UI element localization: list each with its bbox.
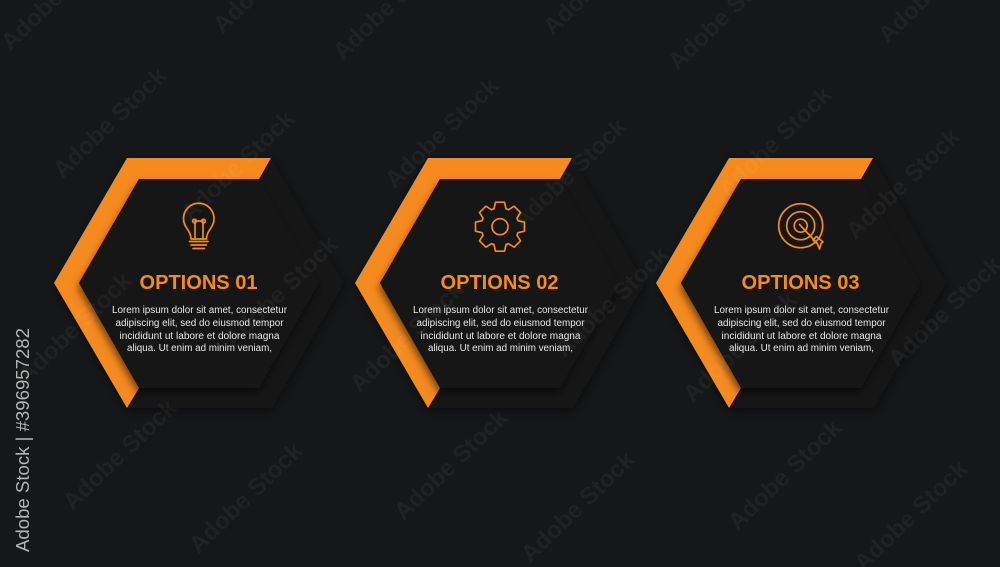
icon: gear [476,202,524,251]
front hexagon 2 [380,179,620,388]
text block 2: adipiscing elit, sed do eiusmod tempor [416,318,585,329]
orange hexagon frame 2 [355,158,572,408]
text block 3: aliqua. Ut enim ad minim veniam, [729,343,874,354]
orange hexagon frame 3 [656,158,873,408]
back hexagon 3 [657,158,946,408]
orange hexagon frame 1 [54,158,271,408]
text block 2 [413,305,589,354]
watermarks: Adobe Stock [345,276,470,398]
watermarks: Adobe Stock [380,72,505,194]
heading: options 02: OPTIONS 02 [440,272,558,294]
watermarks: Adobe Stock [723,414,848,536]
text block 3 [714,305,890,354]
watermarks: Adobe Stock [550,241,675,363]
icon: target with arrow [779,204,823,249]
text block 1: adipiscing elit, sed do eiusmod tempor [116,318,284,329]
icon: light bulb [184,203,214,248]
text block 3: Lorem ipsum dolor sit amet, consectetur [714,305,890,316]
heading: options 03: OPTIONS 03 [742,272,860,294]
panel: option 1 [54,158,344,408]
front hexagon 1 [79,179,319,388]
watermarks: Adobe Stock [508,113,633,235]
watermarks: Adobe Stock [219,231,344,353]
front hexagon 3 [681,179,921,388]
watermarks: Adobe Stock [678,286,803,408]
text block 2: Lorem ipsum dolor sit amet, consectetur [413,305,589,316]
text block 1: incididunt ut labore et dolore magna [120,331,280,342]
heading: options 01: OPTIONS 01 [140,272,258,294]
watermarks: Adobe Stock [176,105,301,227]
watermarks: Adobe Stock [516,446,641,567]
text block 3: incididunt ut labore et dolore magna [722,331,882,342]
text block 1: Lorem ipsum dolor sit amet, consectetur [112,305,288,316]
panel: option 3 [656,158,946,408]
watermarks: Adobe Stock [58,394,183,516]
text block 1 [112,305,288,354]
back hexagon 1 [55,158,344,408]
back hexagon 2 [356,158,645,408]
watermarks: Adobe Stock [48,62,173,184]
text block 1: aliqua. Ut enim ad minim veniam, [127,343,272,354]
watermarks: Adobe Stock [389,404,514,526]
watermarks: Adobe Stock [184,437,309,559]
stock id label: Adobe Stock | #396957282 [13,328,33,552]
watermarks: Adobe Stock [841,123,966,245]
panel: option 2 [355,158,645,408]
watermarks: Adobe Stock [713,81,838,203]
text block 2: incididunt ut labore et dolore magna [420,331,581,342]
text block 3: adipiscing elit, sed do eiusmod tempor [718,318,886,329]
text block 2: aliqua. Ut enim ad minim veniam, [428,343,573,354]
watermarks: Adobe Stock [13,267,138,389]
